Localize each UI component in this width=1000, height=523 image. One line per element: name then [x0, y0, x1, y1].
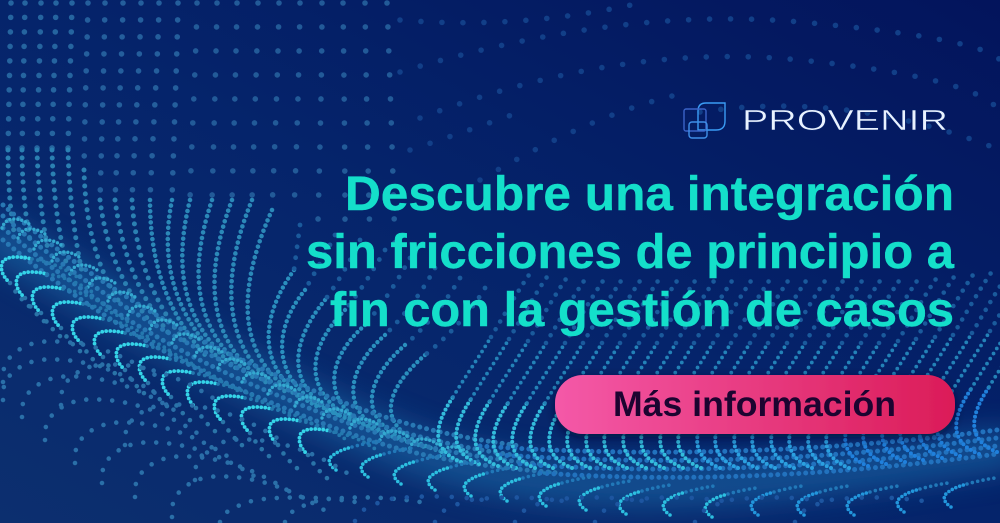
headline: fin con la gestión de casos	[330, 284, 954, 337]
headline: sin fricciones de principio a	[306, 226, 954, 279]
button: más información	[555, 375, 955, 434]
logo: Provenir	[684, 103, 948, 138]
headline	[306, 168, 954, 337]
wordmark: PROVENIR	[742, 105, 948, 137]
icon: overlapping squares	[684, 103, 725, 138]
headline: Descubre una integración	[345, 168, 954, 221]
button: más información: Más información	[613, 385, 896, 424]
